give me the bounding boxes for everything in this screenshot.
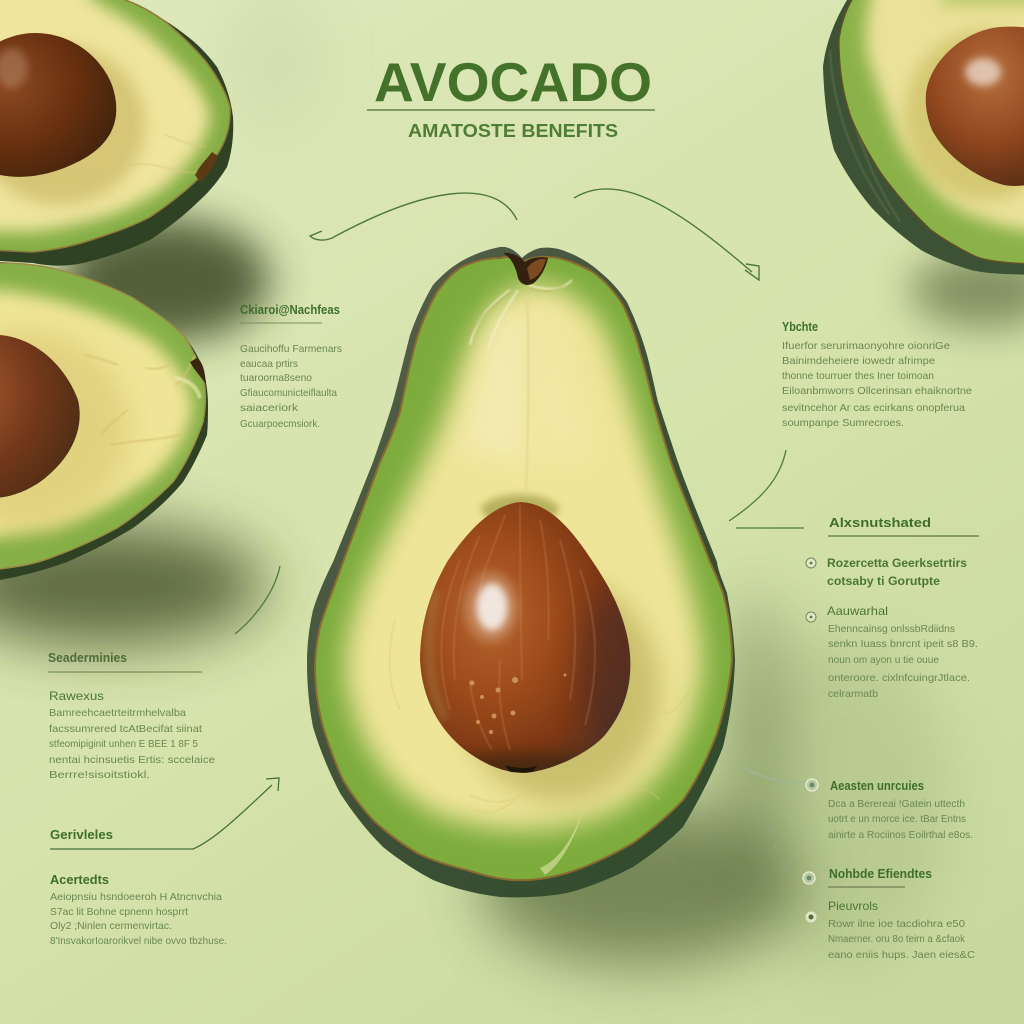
text block: lower left top: stfeomipiginit unhen E BEE 1 8F 5 — [49, 738, 198, 750]
text block: upper left: Ckiaroi@Nachfeas — [240, 303, 340, 317]
text block: lower left bottom: Aeiopnsiu hsndoeeroh H Atncnvchia — [50, 891, 222, 903]
bullet — [806, 558, 816, 568]
text block: lower right: Pieuvrols — [828, 899, 878, 913]
text block: upper left: saiaceriork — [240, 402, 299, 414]
stem notch — [503, 253, 548, 285]
text block: lower left bottom: Acertedts — [50, 873, 109, 887]
text block: middle right: Aauwarhal — [827, 604, 888, 618]
title — [367, 51, 655, 141]
title: AVOCADO — [374, 51, 652, 113]
arrow: left connector — [235, 566, 280, 634]
text block: middle right: Ehenncainsg onlssbRdiidns — [828, 623, 955, 635]
central avocado — [307, 247, 735, 897]
bullet — [806, 612, 816, 622]
text block: upper left: tuaroorna8seno — [240, 372, 312, 384]
text block: upper right: Eiloanbmworrs Ollcerinsan ehaiknortne — [782, 385, 972, 397]
text block: lower left top — [48, 651, 215, 781]
text block: upper left: Gaucihoffu Farmenars — [240, 343, 342, 355]
seed — [0, 33, 116, 177]
cavity shade — [480, 494, 560, 520]
text block: middle right: Rozercetta Geerksetrtirs — [827, 556, 967, 570]
arrow: right connector — [729, 450, 804, 528]
text block: lower right: Nohbde Efiendtes — [829, 867, 932, 881]
seed — [0, 335, 80, 498]
text block: upper right: sevitncehor Ar cas ecirkans onopferua — [782, 402, 965, 414]
text block: lower left bottom: Oly2 ;Ninlen cermenvirtac. — [50, 920, 172, 932]
arrow: top right curve — [574, 189, 759, 280]
text block: lower left bottom — [50, 828, 227, 947]
text block: middle right: senkn Iuass bnrcnt ipeit s8 B9. — [828, 638, 978, 650]
text block: lower right — [803, 779, 975, 961]
text block: lower left top: Bamreehcaetrteitrmhelvalba — [49, 707, 186, 719]
text block: upper right: Ifuerfor serurimaonyohre oionriGe — [782, 340, 950, 352]
text block: upper right: Bainimdeheiere iowedr afrimpe — [782, 355, 935, 367]
seed — [420, 502, 630, 773]
text block: middle right: onteroore. cixlnfcuingrJtlace. — [828, 672, 970, 684]
yellow flesh — [345, 284, 703, 830]
text block: lower left bottom: 8'InsvakorIoarorikvel nibe ovvo tbzhuse. — [50, 935, 227, 947]
text block: upper right: Ybchte — [782, 320, 818, 334]
text block: lower left top: Seaderminies — [48, 651, 127, 665]
text block: lower left top: nentai hcinsuetis Ertis: sccelaice — [49, 754, 215, 766]
text block: upper left: Gfiaucomunicteiflaulta — [240, 387, 337, 399]
text block: lower right: Dca a Berereai !Gatein uttecth — [828, 798, 965, 810]
text block: middle right — [806, 516, 979, 700]
avocado half: top right — [823, 0, 1024, 275]
flesh — [315, 257, 732, 880]
bullet — [803, 872, 815, 884]
connector: lower right short — [767, 823, 787, 870]
text block: lower left top: facssumrered tcAtBecifat siinat — [49, 723, 202, 735]
text block: upper left: eaucaa prtirs — [240, 358, 298, 370]
text block: lower right: eano eniis hups. Jaen eies&C — [828, 949, 975, 961]
text block: middle right: Alxsnutshated — [829, 516, 931, 530]
arrow: lower left — [50, 778, 279, 849]
text block: lower right: Rowr ilne ioe tacdiohra e50 — [828, 918, 965, 930]
text block: lower right: uotrt e un rnorce ice. tBar Entns — [828, 813, 966, 825]
bullet — [806, 779, 818, 791]
text block: lower right: Nmaerner. oru 8o teirn a &cfaok — [828, 933, 966, 945]
text block: lower left bottom: S7ac lit Bohne cpnenn hosprrt — [50, 906, 188, 918]
text block: middle right: celrarmatb — [828, 688, 878, 700]
text block: upper left — [240, 303, 342, 430]
arrow: top left curve — [310, 193, 517, 240]
bullet — [806, 912, 816, 922]
text block: lower left bottom: Gerivleles — [50, 828, 113, 842]
text block: upper right: soumpanpe Sumrecroes. — [782, 417, 904, 429]
avocado half: top left — [0, 0, 233, 266]
text block: lower left top: Rawexus — [49, 689, 104, 703]
text block: lower right: ainirte a Rociinos Eoilrthal e8os. — [828, 829, 973, 841]
text block: lower left top: Berrre!sisoitstiokl. — [49, 769, 150, 781]
avocado half: middle left — [0, 262, 208, 584]
skin — [307, 247, 735, 897]
text block: middle right: cotsaby ti Gorutpte — [827, 574, 940, 588]
text block: upper right — [782, 320, 972, 429]
text block: upper right: thonne tourruer thes Iner toimoan — [782, 370, 934, 382]
text block: lower right: Aeasten unrcuies — [830, 779, 924, 793]
subtitle: AMATOSTE BENEFITS — [408, 121, 618, 141]
text block: upper left: Gcuarpoecmsiork. — [240, 418, 320, 430]
connector: lower right — [743, 766, 805, 782]
text block: middle right: noun om ayon u tie ouue — [828, 654, 939, 666]
seed — [926, 27, 1024, 186]
